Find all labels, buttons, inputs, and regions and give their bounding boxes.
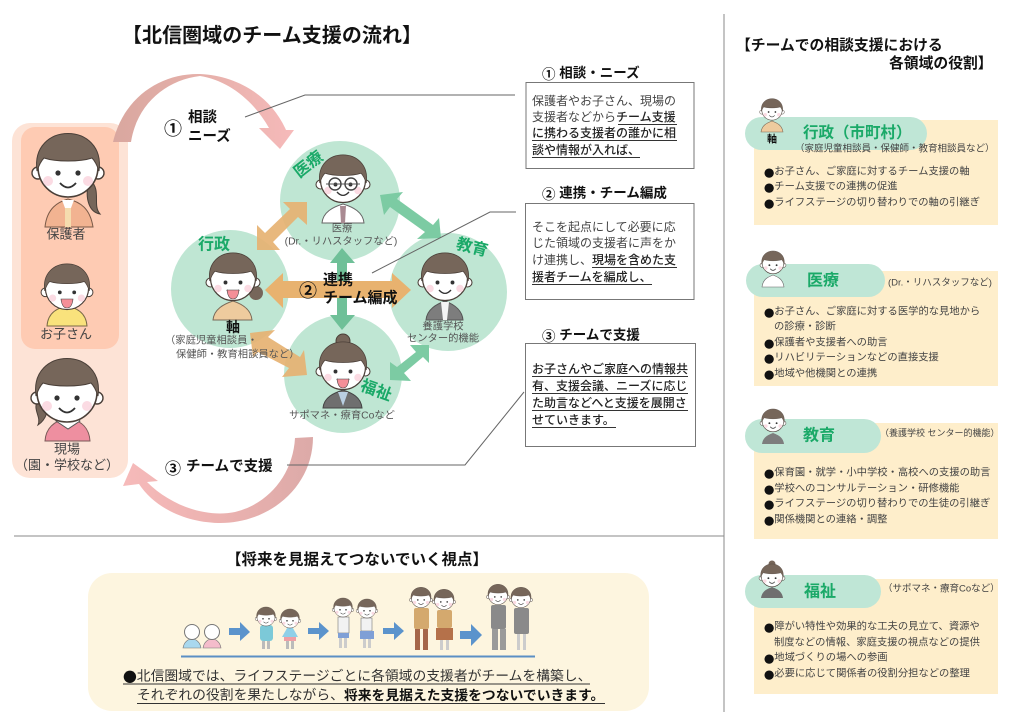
heading: roles [736,36,993,72]
label: axis staff: 軸 [226,319,240,335]
label: field: （園・学校など） [15,458,119,472]
person: child [41,264,93,326]
leader lines [245,95,524,465]
heading: administration: 行政（市町村） [803,122,912,142]
label: step 3: チームで支援 [186,458,273,475]
panel: step 3 text [526,325,696,446]
panel: step 3 text: た助言などへと支援を展開さ [532,395,687,410]
person: welfare [316,334,370,408]
figures: school children [332,598,378,648]
label: field: 現場 [54,442,80,456]
heading: consultation needs: ① 相談・ニーズ [542,63,640,83]
label: welfare heading: 福祉 [358,377,394,404]
label: step 1: ① [164,115,182,141]
heading: future perspective: 【将来を見据えてつないでいく視点】 [226,550,488,568]
arrow: team support [123,437,313,523]
circle: education [389,233,507,351]
icon: education person [760,409,786,444]
label: medical staff: 医療 [332,222,352,234]
card: medical: (Dr.・リハスタッフなど) [888,278,992,288]
label: welfare staff: サポマネ・療育Coなど [289,408,395,422]
arrow: administration to welfare [250,330,307,377]
arrow: welfare to education [390,345,429,381]
label: medical staff: (Dr.・リハスタッフなど) [285,236,397,248]
card: medical [746,251,998,386]
panel: step 2 text: 援者チームを編成し、 [532,269,652,284]
title: 【北信圏域のチーム支援の流れ】 [122,24,422,47]
arrow: stage 1 [229,622,250,641]
heading: roles: 【チームでの相談支援における [736,36,943,54]
arrow: consultation [113,74,294,149]
card: administration: ●チーム支援での連携の促進 [764,180,898,194]
label: axis staff: 保健師・教育相談員など） [176,348,300,360]
arrow: medical to education [380,192,441,239]
label: step 2: チーム編成 [323,288,398,306]
label: step 3: ③ [165,455,181,479]
label: step 2 [299,270,398,306]
card: education: ●学校へのコンサルテーション・研修機能 [764,482,959,496]
icon: medical person [760,251,786,287]
arrow: stage 4 [460,624,482,646]
card: education: ●ライフステージの切り替わりでの生徒の引継ぎ [764,496,990,512]
label: axis staff [165,319,300,360]
label: step 1: 相談 [188,108,217,126]
card: education: （養護学校 センター的機能） [880,427,1000,438]
label: school staff [407,320,479,344]
arrow: vertical link [330,248,355,330]
panel: team diagram [165,141,507,433]
panel: step 3 text: せていきます。 [532,413,615,427]
label: step 2: ② [299,277,317,303]
card: welfare: ●必要に応じて関係者の役割分担などの整理 [764,666,970,682]
label: step 1: ニーズ [188,127,231,145]
arrow: administration to medical [257,202,307,250]
card: administration [745,99,998,225]
panel: step 2 text: そこを起点にして必要に応 [532,220,676,234]
person: medical [316,155,370,223]
heading: welfare: 福祉 [804,582,836,600]
card: medical: ●リハビリテーションなどの直接支援 [764,350,939,366]
label: step 3 [165,455,273,479]
heading: roles: 各領域の役割】 [889,54,993,72]
arrow: stage 2 [308,622,329,640]
card: medical: ●お子さん、ご家庭に対する医学的な見地から [764,304,980,320]
label: axis: 軸 [767,132,777,146]
icon: administration person [760,99,784,132]
text: summary: それぞれの役割を果たしながら、将来を見据えた支援をつないでいきます。 [137,686,604,702]
panel: life stages [88,573,649,711]
card: administration: ●お子さん、ご家庭に対するチーム支援の軸 [764,164,970,180]
text: summary [123,666,605,704]
panel: step 3 text: 有、支援会議、ニーズに応じ [532,378,687,393]
person: guardian [32,134,104,227]
heading: medical: 医療 [807,272,839,290]
arrow: horizontal link [265,273,411,308]
panel: step 2 text [526,183,694,300]
circle: welfare [284,315,402,433]
icon: welfare person [759,560,785,598]
label: step 2: 連携 [323,270,353,288]
card: medical: の診療・診断 [774,320,836,332]
card: education: ●関係機関との連絡・調整 [764,512,887,528]
panel: family and field [12,123,128,478]
heading: collaboration: ② 連携・チーム編成 [542,183,667,203]
label: step 1 [164,108,231,145]
label: education heading: 教育 [454,234,490,260]
label: school staff: 養護学校 [422,320,464,332]
circle: administration [171,230,289,348]
heading: team support: ③ チームで支援 [542,325,640,345]
label: administration heading: 行政 [198,236,230,254]
card: education: ●保育園・就学・小中学校・高校への支援の助言 [764,466,991,480]
panel: step 1 text [526,63,694,168]
panel: step 1 text: 談や情報が入れば、 [532,142,640,157]
label: guardian: 保護者 [46,226,86,242]
card: administration: （家庭児童相談員・保健師・教育相談員など） [795,142,995,154]
panel: step 1 text: 支援者などからチーム支援 [532,109,676,124]
heading: education: 教育 [803,426,835,444]
label: school staff: センター的機能 [407,332,479,344]
card: education [745,409,1000,539]
arrow: stage 3 [383,622,404,640]
figures: adults [486,584,533,650]
card: administration: ●ライフステージの切り替わりでの軸の引継ぎ [764,196,980,210]
card: medical: ●保護者や支援者への助言 [764,336,888,350]
card: welfare: ●障がい特性や効果的な工夫の見立て、資源や [764,620,980,634]
panel: step 2 text: じた領域の支援者に声をか [532,236,676,250]
figures: teenagers [409,587,456,650]
card: welfare: 制度などの情報、家庭支援の視点などの提供 [774,636,980,648]
panel: step 1 text: に携わる支援者の誰かに相 [532,125,676,140]
person: administration [206,253,263,320]
card: medical: ●地域や他機関との連携 [764,366,877,382]
card: welfare [745,560,1000,694]
panel: step 2 text: け連携し、現場を含めた支 [532,252,676,267]
label: medical heading: 医療 [291,148,327,182]
label: field [15,442,119,472]
circle: medical [280,141,400,261]
figures: babies [183,624,221,648]
panel: step 1 text: 保護者やお子さん、現場の [532,93,676,108]
label: medical staff [285,222,397,248]
label: axis staff: （家庭児童相談員・ [165,334,258,346]
text: summary: ●北信圏域では、ライフステージごとに各領域の支援者がチームを構築し、 [123,666,591,686]
figures: toddlers [255,607,301,649]
card: welfare: ●地域づくりの場への参画 [764,650,888,666]
card: welfare: （サポマネ・療育Coなど） [883,582,1000,594]
person: education [418,253,472,320]
label: child: お子さん [40,326,92,342]
panel: step 3 text: お子さんやご家庭への情報共 [532,361,688,376]
person: field staff [31,358,103,441]
